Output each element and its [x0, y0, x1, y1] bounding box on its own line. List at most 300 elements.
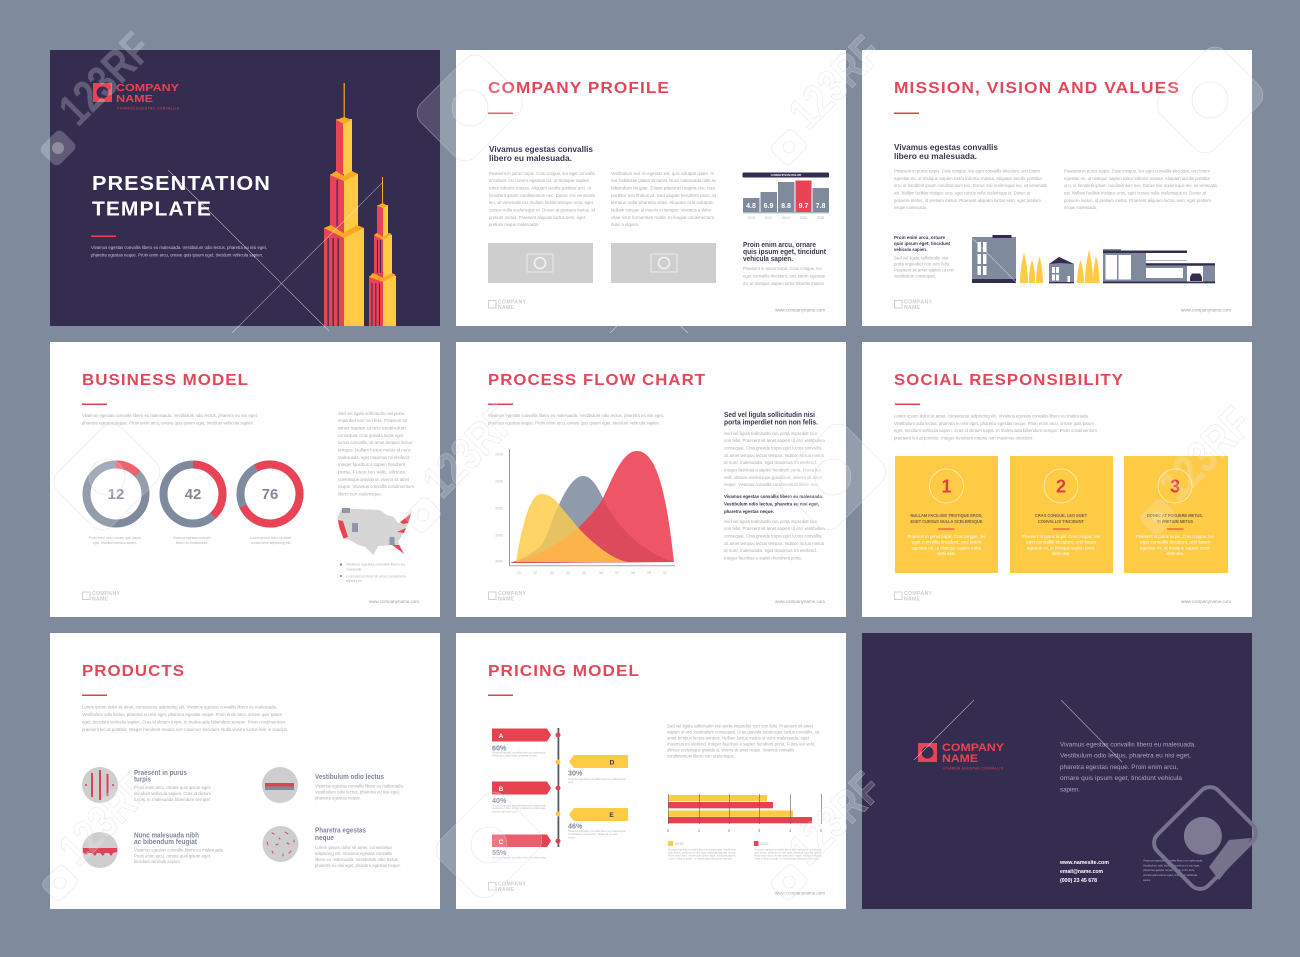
footer logo: [488, 882, 527, 893]
arrow C: [492, 834, 551, 860]
area chart: 2005: [495, 506, 503, 510]
illustration: office building: [972, 235, 1016, 283]
map legend: Lorem ipsum dolor sit amet, consectetur: [346, 574, 407, 578]
text block: condimentum libero non scelerisque.: [667, 754, 735, 758]
side note: Sed vel ligula sollicitudin nisi: [894, 256, 948, 260]
closing text: ornare quis ipsum eget, tincidunt vehicula: [1060, 775, 1182, 782]
side text: Sed vel ligula sollicitudin nisi porta imperdiet non: [724, 431, 818, 436]
area chart: 2009: [495, 452, 503, 456]
icon: serrated band: [82, 832, 118, 868]
horizontal bar chart: 5: [820, 828, 823, 833]
text block: maximus mi eleifend. Integer faucibus a sapien hendrerit porta. Fusce leo velit,: [667, 742, 815, 746]
arrow A: Vivamus egestas convallis libero eu malesuada.: [492, 750, 546, 754]
side text: neque. Vivamus convallis condimentum: [338, 484, 414, 489]
heading: business model: BUSINESS MODEL: [82, 372, 249, 389]
footnote: ornare quis ipsum eget, tincidunt vehicula: [1143, 873, 1197, 877]
panel: company profile: [456, 50, 846, 326]
illustration: small tower: [369, 177, 396, 326]
arrow E: [568, 808, 628, 840]
card 3: ID PRETIUM METUS: [1157, 519, 1193, 524]
heading: presentation template: TEMPLATE: [92, 198, 212, 220]
intro text: Vivamus egestas convallis libero eu malesuada. Vestibulum odio lectus, pharetra eu nisi eget,: [82, 413, 258, 418]
text column 2: orci, ut hendrerit ipsum condimentum nec. Donec nisi scelerisque leo, sit venenatis: [1064, 183, 1217, 188]
side note: vestibulum consequat.: [894, 274, 936, 278]
product 3 text: Proin enim arcu, ornare quis ipsum eget,: [134, 854, 211, 858]
card 2: [1010, 456, 1113, 573]
cover text block: Vivamus egestas convallis libero eu malesuada. Vestibulum odio lectus, pharetra eu nisi eget,: [91, 245, 267, 250]
footer logo: [894, 300, 933, 311]
legend: 2022: 2022: [760, 842, 768, 846]
contact details: email@name.com: [1060, 869, 1103, 875]
text block: sapien ut orci vestibulum consequat. Cras gravida turpis eget luctus convallis, sit: [667, 730, 820, 734]
side text: id nunc malesuada, eget maximus mi eleifend.: [724, 548, 817, 553]
logo: company name: COMPANY: [942, 742, 1005, 754]
footnote: [1143, 858, 1203, 882]
area chart: 01: [517, 571, 521, 575]
text column 2: Nullam congue id mauris et semper. Vivamus a dolor: [611, 208, 712, 212]
side text: non felis. Praesent sit amet sapien ut orci vestibulum: [724, 526, 825, 531]
side note: [894, 235, 954, 278]
text column 1: pretium neque malesuada.: [489, 222, 539, 227]
watermark stamps: 123RF: [1148, 397, 1261, 510]
card 1: eget convallis tincidunt, orci lorem: [912, 540, 982, 544]
bar chart: LOREM IPSUM DOLOR: [771, 173, 801, 177]
product 4 text: libero eu malesuada. Vestibulum odio lectus,: [315, 857, 399, 862]
side text: neque. Vivamus convallis condimentum libero non.: [724, 482, 819, 487]
text column 1: leo, sit venenatis est. Nullam facilisi tristique eros, eget: [489, 200, 594, 205]
heading: presentation template: [92, 172, 271, 220]
side text: pharetra egestas neque.: [724, 509, 774, 514]
card 3: DONEC AT POSUERE METUS,: [1147, 513, 1203, 518]
intro text: pharetra egestas neque. Proin enim arcu, ornare quis ipsum eget, tincidunt vehicula sapien.: [488, 420, 660, 426]
closing text: Vivamus egestas convallis libero eu malesuada.: [1060, 742, 1196, 748]
arrow B: Vivamus egestas convallis libero eu malesuada.: [492, 804, 546, 808]
side text: amet sapien ut orci vestibulum: [338, 426, 406, 430]
side text: [724, 412, 825, 560]
product 4 text: adipiscing elit. Vivamus egestas convallis: [315, 851, 392, 856]
side note: porta imperdiet non non felis.: [894, 262, 950, 266]
side text: imperdiet non non felis. Praesent sit: [338, 418, 408, 423]
side note: Praesent in purus turpis. Cras congue, leo: [743, 266, 823, 271]
side text: Sed vel ligula sollicitudin nisi porta imperdiet non: [724, 519, 818, 524]
footnote: pharetra egestas neque. Proin enim arcu,: [1143, 868, 1195, 872]
side text: Integer faucibus a sapien hendrerit porta. Fusce leo: [724, 468, 822, 472]
footer url: www.companyname.com: [1181, 599, 1231, 604]
side text: consequat. Cras gravida turpis eget luctus convallis,: [724, 446, 822, 450]
bar chart: 2010: [747, 216, 755, 220]
donut chart: 42: 42: [185, 486, 201, 503]
side note: eget convallis tincidunt, orci lorem egestas: [743, 274, 825, 278]
footer logo: [488, 300, 527, 311]
footnote: Vivamus egestas convallis libero eu malesuada.: [1143, 858, 1203, 862]
footer logo: [894, 591, 933, 602]
text column 2: [1064, 168, 1217, 210]
arrow E: Vivamus egestas convallis libero eu malesuada.: [568, 829, 626, 833]
arrow D: eget.: [568, 780, 574, 784]
heading: products: PRODUCTS: [82, 663, 185, 680]
horizontal bar chart: 4: [789, 828, 792, 833]
arrow D: Vivamus egestas convallis libero eu malesuada.: [568, 777, 626, 781]
side text: Sed vel ligula sollicitudin nisi: [724, 412, 815, 419]
product 4 text: Pharetra egestas: [315, 826, 366, 834]
arrow B: pharetra egestas neque.: [492, 810, 518, 814]
intro text: [488, 413, 664, 426]
footer logo: COMPANY: [498, 591, 527, 597]
area chart: 09: [647, 571, 651, 575]
arrow B: 40%: [492, 796, 507, 805]
side text: non felis. Praesent sit amet sapien ut orci vestibulum: [724, 438, 825, 443]
side note: Proin enim arcu, ornare: [743, 242, 816, 249]
product 1 text: tincidunt vehicula sapien. Cras id dictum: [134, 791, 211, 796]
donut captions: libero eu malesuada.: [176, 541, 208, 545]
product 1 text: turpis. In malesuada bibendum semper.: [134, 797, 211, 802]
intro text: [82, 704, 288, 732]
footnote: Vestibulum odio lectus, pharetra eu nisi eget,: [1143, 864, 1200, 868]
text column 2: vitae risus fermentum mollis. In feugiat condimentum: [611, 215, 714, 220]
closing text: Vestibulum odio lectus, pharetra eu nisi eget,: [1060, 752, 1191, 760]
bar chart: 2014: [782, 216, 790, 220]
heading: mission: MISSION, VISION AND VALUES: [894, 80, 1180, 97]
product 2 text: Vivamus egestas convallis libero eu malesuada.: [315, 784, 404, 788]
panel: business model: [50, 342, 440, 617]
text column 2: Vestibulum sed mi egestas est, quis volutpat quam. In: [611, 171, 715, 176]
intro text: eget, tincidunt vehicula sapien. Cras id dictum turpis. In malesuada bibendum semper. Proin condimentum: [82, 720, 285, 724]
footer logo: COMPANY: [904, 591, 933, 597]
donut captions: consectetur adipiscing elit.: [251, 541, 291, 545]
arrow A: Vestibulum odio lectus, pharetra eu nisi.: [492, 754, 537, 758]
card 2: 2: [1056, 476, 1066, 496]
side text: velit, ultrices scelerisque gravida ut, viverra sit amet: [724, 475, 823, 480]
footnote: sapien.: [1143, 878, 1151, 882]
text column 1: cursus nulla scelerisque et. Donec at posuere metus. Id: [489, 208, 596, 212]
footer logo: NAME: [498, 305, 515, 311]
text column 1: pretium metus. Praesent aliquam luctus sem, eget: [489, 215, 586, 220]
card 2: CRAS CONGUE, LEO EGET: [1035, 513, 1087, 518]
logo: company name: NAME: [116, 93, 153, 105]
product 4 text: neque: [315, 833, 334, 842]
bar chart: [742, 172, 829, 220]
side text: sit amet tempus lectus tempus. Nullam luctus metus: [724, 541, 824, 546]
intro text: Lorem ipsum dolor sit amet, consectetur adipiscing elit. Vivamus egestas convallis libero eu malesuada.: [894, 414, 1089, 418]
side text: Integer faucibus a sapien hendrerit: [338, 462, 406, 467]
donut chart: 12: 12: [108, 486, 124, 503]
intro text: Vestibulum odio lectus, pharetra eu nisi eget, pharetra egestas neque. Proin enim arcu, ornare quis ipsum: [894, 421, 1094, 426]
heading: presentation template: PRESENTATION: [92, 172, 271, 195]
card 3: Praesent in purus turpis. Cras congue, leo: [1136, 534, 1215, 539]
card 3: [1124, 456, 1228, 573]
arrow B: B: [499, 786, 504, 793]
text column 2: neque malesuada.: [1064, 205, 1097, 210]
text column 1: [489, 171, 596, 227]
horizontal bar chart: 2: [728, 828, 731, 833]
bar chart: 8.8: [781, 203, 791, 210]
arrow D: [568, 755, 628, 784]
arrow A: [492, 728, 551, 758]
card 1: lobortis massa.: [938, 551, 956, 556]
legend: 2016: Vivamus egestas convallis libero eu malesuada. Vestibulum: [668, 848, 737, 852]
donut captions: Vivamus egestas convallis: [173, 536, 211, 540]
text column 1: est. Nullam facilisis tristique eros, eget cursus nulla scelerisque et. Donec at: [894, 190, 1031, 196]
watermark lines: [168, 170, 1122, 762]
arrow B: Vestibulum odio lectus, pharetra eu nisi eget,: [492, 806, 546, 810]
watermark stamps: 123RF: [778, 26, 891, 139]
map legend: adipiscing elit.: [346, 579, 362, 583]
card 1: egestas mi, ut tristique sapien tortor: [912, 546, 982, 550]
bar chart: 2018: [817, 216, 824, 220]
horizontal bar chart: 0: [667, 828, 670, 833]
text block: [667, 724, 820, 758]
area chart: 06: [599, 571, 603, 575]
cover text block: [91, 245, 267, 258]
product 1 text: Praesent in purus: [134, 768, 187, 777]
footer url: www.companyname.com: [369, 599, 419, 604]
panel: cover slide: [50, 50, 440, 326]
intro text: praesent leo at porttitor. Integer hendrerit mauris non maximus tincidunt.: [894, 436, 1033, 440]
product 4 text: pharetra eu nisi eget, pharetra egestas neque.: [315, 863, 401, 868]
illustration: house: [1049, 257, 1074, 283]
watermark stamps: 123RF: [48, 22, 161, 135]
card 1: EGET CURSUS NULLA SCELERISQUE: [910, 519, 983, 524]
map: united states: [337, 508, 412, 555]
area chart: 2006: [495, 480, 503, 484]
watermark stamps: 123RF: [412, 394, 525, 507]
area chart: 02: [533, 571, 537, 575]
footer url: www.companyname.com: [775, 890, 825, 896]
map legend: malesuada.: [346, 568, 362, 572]
card 3: 3: [1170, 476, 1180, 496]
bar chart: 9.7: [799, 203, 808, 210]
area chart: 03: [550, 571, 554, 575]
subheading: Vivamus egestas convallis: [894, 143, 999, 152]
product 3 text: ac bibendum feugiat: [134, 837, 198, 846]
text column 1: [894, 168, 1047, 210]
product 2 text: [315, 772, 404, 800]
card 3: eget convallis tincidunt, orci lorem: [1140, 540, 1211, 544]
icon: scattered cells: [262, 826, 298, 862]
text column 2: egestas mi, ut tristique sapien tortor lobortis massa. Aliquam iaculis porttitor: [1064, 176, 1211, 181]
icon: vertical lines: [82, 767, 118, 803]
panel: pricing model: [456, 633, 846, 909]
area chart: 08: [631, 571, 635, 575]
footer logo: COMPANY: [498, 882, 527, 888]
legend: 2022: Cras id dictum turpis. In malesuada bibendum semper.: [754, 856, 819, 860]
donut chart: 76: 76: [262, 486, 278, 503]
closing text: pharetra egestas neque. Proin enim arcu,: [1060, 764, 1178, 771]
text column 1: Praesent in purus turpis. Cras congue, leo eget convallis tincidunt, orci lorem: [894, 168, 1040, 174]
text block: amet tempus lectus tempus. Nullam luctus metus id nunc malesuada, eget: [667, 736, 810, 740]
text column 1: neque malesuada.: [894, 205, 927, 210]
product 2 text: pharetra egestas neque.: [315, 796, 361, 800]
footer url: www.companyname.com: [775, 599, 825, 604]
side text: porta imperdiet non non felis.: [724, 420, 818, 426]
side note: vehicula sapien.: [894, 247, 927, 253]
intro text: [894, 414, 1097, 440]
product 1 text: turpis: [134, 774, 151, 784]
bar chart: 7.8: [816, 203, 825, 210]
footer logo: COMPANY: [904, 300, 933, 306]
donut chart: 12: [86, 464, 146, 524]
donut captions: Proin enim arcu, ornare quis ipsum: [89, 536, 141, 540]
panel: social responsibility: [862, 342, 1252, 617]
legend: 2022: Proin enim arcu, ornare quis ipsum eget, tincidunt sapien.: [754, 854, 822, 858]
footer logo: COMPANY: [92, 591, 121, 597]
text block: ultrices scelerisque gravida ut, viverra sit amet neque. Vivamus convallis: [667, 748, 794, 752]
heading: company profile: COMPANY PROFILE: [488, 80, 670, 97]
area chart: 04: [566, 571, 570, 575]
card 2: eget convallis tincidunt, orci lorem: [1026, 540, 1097, 544]
cover text block: pharetra egestas neque. Proin enim arcu, ornare quis ipsum eget, tincidunt vehicula sapien.: [91, 252, 263, 258]
heading: pricing model: PRICING MODEL: [488, 663, 640, 680]
side text: Vestibulum odio lectus, pharetra eu nisi eget,: [724, 502, 819, 506]
logo: company name: COMPANY: [116, 82, 179, 94]
legend: 2016: Cras id dictum turpis. In malesuada bibendum semper.: [668, 856, 733, 860]
logo: company name: VIVAMUS EGESTAS CONVALLIS: [943, 766, 1004, 770]
subheading: [489, 145, 594, 163]
area chart: 05: [582, 571, 586, 575]
text column 1: orci, ut hendrerit ipsum condimentum nec. Donec nisi scelerisque leo, sit venenatis: [894, 183, 1047, 188]
card 2: lobortis massa.: [1052, 551, 1070, 556]
legend: 2016: Proin enim arcu, ornare quis ipsum eget, tincidunt sapien.: [668, 854, 736, 858]
footer logo: NAME: [904, 596, 921, 602]
card 3: egestas mi, ut tristique sapien tortor: [1140, 546, 1211, 550]
icon: stacked bar: [262, 767, 298, 803]
side text: porta. Fusce leo velit, ultrices: [338, 470, 405, 474]
heading: social responsibility: SOCIAL RESPONSIBILITY: [894, 372, 1124, 389]
intro text: pharetra egestas neque. Proin enim arcu, ornare quis ipsum eget, tincidunt vehicula sapien.: [82, 420, 254, 426]
area chart: 2003: [495, 534, 503, 538]
image placeholder 1: [488, 243, 593, 283]
product 4 text: Lorem ipsum dolor sit amet, consectetur: [315, 845, 393, 850]
arrow C: Vivamus egestas convallis libero eu malesuada.: [492, 856, 546, 860]
text block: Sed vel ligula sollicitudin nisi porta imperdiet non non felis. Praesent sit amet: [667, 724, 814, 728]
side text: consequat. Cras gravida turpis eget luctus convallis,: [724, 534, 822, 538]
product 3 text: [134, 830, 224, 864]
card 1: Praesent in purus turpis. Cras congue, leo: [908, 534, 986, 539]
bar chart: 4.8: [746, 203, 756, 210]
text column 2: [611, 171, 717, 227]
closing text: sapien.: [1060, 786, 1080, 794]
side note: Praesent sit amet sapien ut orci: [894, 268, 954, 272]
logo: company name: [93, 82, 180, 110]
side note: mi, ut tristique sapien tortor lobortis massa.: [743, 281, 825, 286]
text column 2: posuere metus, id pretium metus. Praesent aliquam luctus sem, eget pretium: [1064, 198, 1211, 203]
donut captions: Lorem ipsum dolor sit amet,: [250, 536, 292, 540]
map legend: [340, 562, 407, 583]
legend: 2022: Vivamus egestas convallis libero eu malesuada. Vestibulum: [754, 848, 823, 852]
arrow E: Vestibulum odio lectus, pharetra eu nisi.: [568, 832, 618, 836]
arrow E: 46%: [568, 822, 583, 830]
side note: vehicula sapien.: [743, 256, 793, 263]
text column 2: nunc a dignim.: [611, 222, 639, 227]
side text: Vivamus egestas convallis libero eu malesuada.: [724, 494, 823, 499]
text column 2: hac habitasse platea dictumst. Nunc malesuada nibh ac: [611, 178, 717, 183]
footer logo: NAME: [498, 596, 515, 602]
logo: company name: NAME: [942, 753, 978, 765]
footer logo: [82, 591, 121, 602]
product 1 text: Proin enim arcu, ornare quis ipsum eget,: [134, 785, 211, 790]
illustration: tall tower: [324, 83, 364, 326]
heading: process flow chart: PROCESS FLOW CHART: [488, 372, 706, 389]
footer logo: NAME: [904, 305, 921, 311]
arrow D: 30%: [568, 768, 583, 778]
arrow D: D: [610, 760, 615, 766]
side text: libero non scelerisque.: [338, 492, 382, 496]
text column 2: est. Nullam facilisis tristique eros, eget cursus nulla scelerisque et. Donec at: [1064, 190, 1207, 196]
footer logo: COMPANY: [498, 300, 527, 306]
panel: mission vision values: [862, 50, 1252, 326]
footer url: www.companyname.com: [775, 308, 825, 312]
side note: quis ipsum eget, tincidunt: [894, 241, 950, 247]
watermark stamps: 123RF: [778, 762, 891, 875]
product 4 text: [315, 826, 401, 868]
subheading: [894, 143, 999, 161]
subheading: libero eu malesuada.: [894, 152, 977, 161]
side text: consequat. Cras gravida turpis eget: [338, 433, 404, 438]
arrow A: 60%: [492, 744, 507, 752]
side text: malesuada, eget maximus mi eleifend.: [338, 455, 410, 460]
legend: 2022: [754, 841, 823, 860]
card 3: lobortis massa.: [1166, 551, 1184, 556]
text column 1: tincidunt, orci lorem egestas mi, ut tristique sapien: [489, 178, 590, 183]
intro text: praesent leo at porttitor. Integer hendrerit mauris non maximus tincidunt. Nulla viverra luctus felis in suscipit.: [82, 727, 288, 732]
intro text: [82, 413, 258, 426]
legend: 2016: 2016: [675, 842, 683, 846]
product 2 text: Vestibulum odio lectus: [315, 772, 384, 781]
side note: [743, 242, 827, 286]
text column 1: posuere metus, id pretium metus. Praesent aliquam luctus sem, eget pretium: [894, 198, 1041, 203]
bar chart: 6.9: [764, 203, 773, 210]
text column 2: Praesent in purus turpis. Cras congue, leo eget convallis tincidunt, orci lorem: [1064, 168, 1210, 174]
logo: company name: [918, 742, 1005, 770]
side text: id nunc malesuada, eget maximus mi eleifend.: [724, 460, 817, 465]
panel: closing slide: [862, 633, 1252, 909]
side text: luctus convallis, sit amet tempus lectus: [338, 440, 412, 445]
illustration: trees left: [1020, 252, 1043, 283]
donut captions: eget, tincidunt vehicula sapien.: [93, 541, 137, 545]
timeline: [556, 728, 560, 847]
side text: Sed vel ligula sollicitudin nisi porta: [338, 411, 405, 416]
horizontal bar chart: [667, 794, 823, 833]
card 1: NULLAM FACILISIS TRISTIQUE EROS,: [910, 513, 982, 518]
product 3 text: tincidunt vehicula sapien.: [134, 859, 181, 864]
card 1: 1: [941, 476, 952, 496]
footer url: www.companyname.com: [1181, 308, 1231, 312]
subheading: Vivamus egestas convallis: [489, 145, 594, 154]
horizontal bar chart: 1: [698, 828, 701, 833]
watermark stamps: 123RF: [48, 762, 161, 875]
intro text: Vestibulum odio lectus, pharetra eu nisi eget, pharetra egestas neque. Proin enim arcu, ornare quis ipsum: [82, 712, 282, 717]
intro text: Vivamus egestas convallis libero eu malesuada. Vestibulum odio lectus, pharetra eu nisi eget,: [488, 413, 664, 418]
area chart: 2004: [495, 560, 503, 564]
area chart: 07: [615, 571, 619, 575]
product 2 text: Vestibulum odio lectus, pharetra eu nisi eget,: [315, 790, 400, 794]
card 2: CONVALLIS TINCIDUNT: [1038, 519, 1084, 524]
contact details: (000) 23 45 678: [1060, 878, 1097, 884]
side note: quis ipsum eget, tincidunt: [743, 249, 827, 256]
footer logo: NAME: [498, 887, 515, 893]
image placeholder 2: [611, 243, 716, 283]
logo: company name: VIVAMUS EGESTAS CONVALLIS: [117, 106, 180, 110]
legend: 2016: odio lectus, pharetra eu nisi eget, pharetra egestas neque.: [668, 850, 736, 854]
text column 2: porttitor nisi finibus at. Sed aliquet hendrerit risus, at: [611, 193, 717, 198]
product 3 text: Vivamus egestas convallis libero eu malesuada.: [134, 848, 224, 852]
text column 2: bibendum feugiat. Etiam placerat magna dui, non: [611, 186, 716, 190]
bar chart: 2016: [800, 216, 807, 220]
panel: products: [50, 633, 440, 909]
text column 1: tortor lobortis massa. Aliquam iaculis porttitor orci, ut: [489, 186, 592, 190]
bar chart: 2012: [765, 216, 772, 220]
donut chart: 76: [230, 454, 310, 534]
